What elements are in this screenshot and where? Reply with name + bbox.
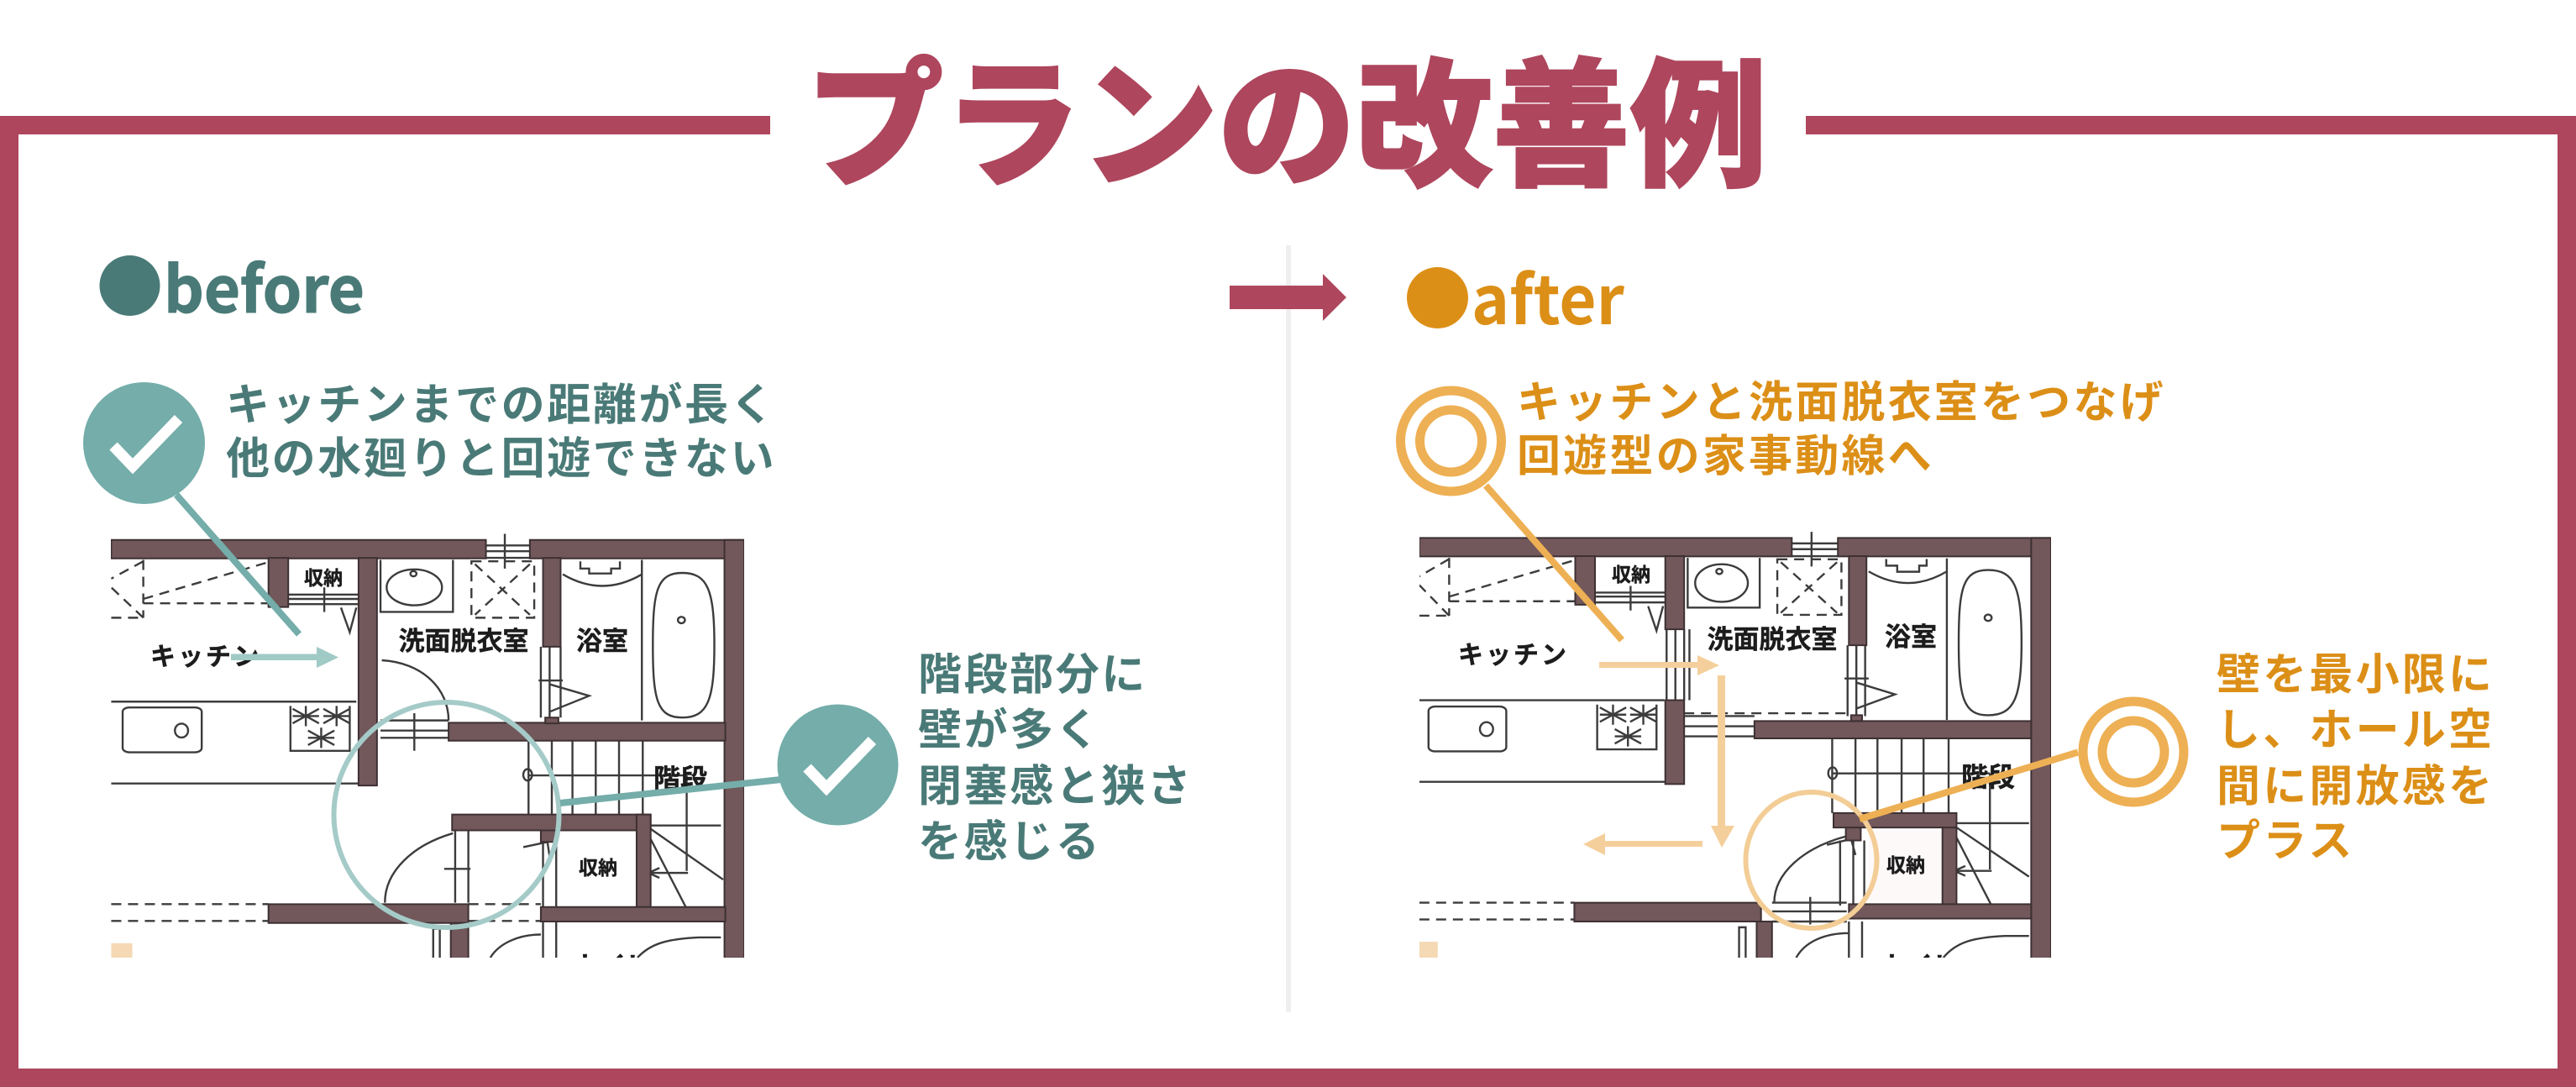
room labels: after: 収納 [1886,854,1925,876]
callout text: circulation: 回遊型の家事動線へ [1517,433,1934,481]
callout text: hall openness: し、ホール空 [2217,706,2495,755]
room labels: after: トイレ [1882,953,1958,980]
callout text: stairs walls: 閉塞感と狭さ [918,763,1194,811]
callout text: circulation [1517,379,2166,481]
room labels: before: 階段 [653,764,707,794]
after heading [1407,247,1624,344]
title: プランの改善例 [806,14,1767,215]
callout text: stairs walls: を感じる [918,818,1101,867]
highlight circle: before stairs [334,702,559,927]
callout text: kitchen distance [226,381,776,484]
callout text: stairs walls: 壁が多く [918,706,1101,755]
callout text: kitchen distance: 他の水廻りと回遊できない [226,435,776,484]
highlight ellipse: after hall [1745,792,1876,928]
floor plan: before [111,533,744,980]
callout text: hall openness [2217,651,2495,866]
callout text: hall openness: プラス [2217,817,2355,866]
room labels: before: 収納 [304,567,343,589]
room labels: before [150,567,707,980]
icon: check badge 1 [83,382,205,504]
callout text: hall openness: 間に開放感を [2217,763,2495,811]
icon: check badge 2 [778,704,899,825]
room labels: before: キッチン [150,643,261,671]
before heading: before [164,239,365,331]
flow arrows: after [1583,655,1734,855]
room labels: before: 収納 [579,857,617,879]
callout text: circulation: キッチンと洗面脱衣室をつなげ [1517,379,2166,428]
leader lines: before [176,495,781,803]
icon: double circle 2 [2083,701,2184,802]
room labels: before: 浴室 [576,627,628,656]
room labels: after: 収納 [1612,564,1650,586]
room labels: before: トイレ [575,953,651,980]
callout text: stairs walls [918,651,1194,867]
room labels: before: 洗面脱衣室 [398,627,529,656]
centre divider [1286,245,1291,1012]
callout text: stairs walls: 階段部分に [918,651,1147,700]
flow arrow: before [231,647,338,668]
icon: double circle 1 [1401,391,1502,491]
room labels: after [1458,564,2015,980]
after heading: after [1472,247,1624,344]
arrow: before to after [1230,274,1346,321]
room labels: after: 浴室 [1885,622,1937,652]
callout text: hall openness: 壁を最小限に [2217,651,2495,700]
floor plan: after [1419,532,2051,980]
room labels: after: 洗面脱衣室 [1707,625,1838,654]
leader lines: after [1486,486,2078,819]
room labels: after: キッチン [1458,642,1569,670]
callout text: kitchen distance: キッチンまでの距離が長く [226,381,776,430]
room labels: after: 階段 [1961,762,2015,792]
